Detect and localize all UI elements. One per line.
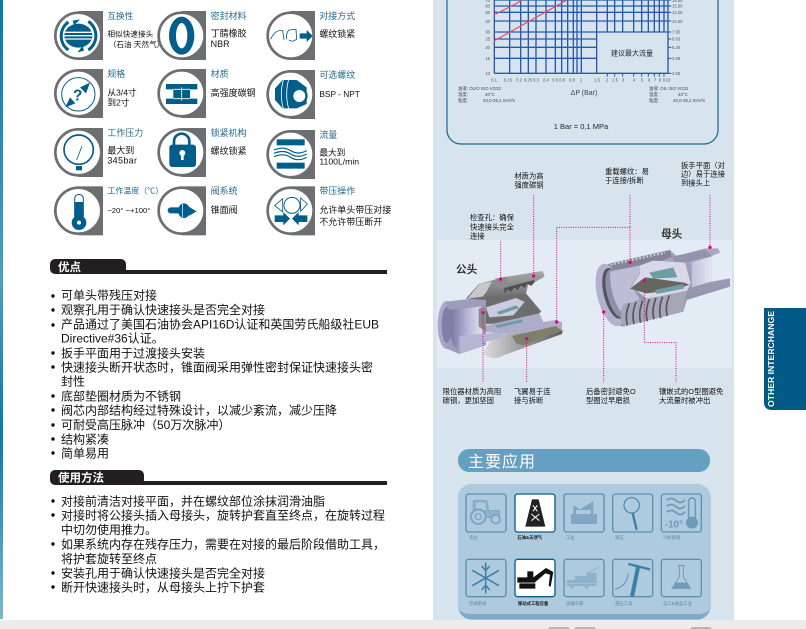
tile: cold: 冷却系统: [663, 534, 681, 541]
tile: oil and gas: [515, 494, 555, 541]
text: 工作温度 body: −20° ~+100°: [107, 206, 150, 215]
tile: oil and gas: 石油&天然气: [517, 534, 543, 541]
text block: advantages list: 简单易用: [61, 446, 109, 460]
icon: size: ?: [73, 88, 82, 105]
text block: advantages list: 可单头带残压对接: [61, 288, 157, 302]
callout: embedded o-ring: 大流量时被冲出: [659, 396, 710, 405]
x axis labels: 2: [606, 78, 609, 82]
heading: 规格: 规格: [107, 68, 125, 79]
tile: mobile construction: [515, 559, 555, 607]
test conditions left: [458, 85, 516, 104]
tile: industry: [564, 494, 604, 540]
label: 公头: 公头: [456, 263, 478, 276]
text block: usage list: 中切勿使用推力。: [61, 522, 157, 537]
text: 工作压力 body: 345bar: [107, 156, 137, 166]
x axis labels: 0.25: [524, 78, 533, 82]
test conditions left: 粘度:: [458, 97, 468, 104]
text: 密封材料 body: NBR: [211, 39, 230, 49]
callout: wing: 接与拆断: [514, 396, 544, 405]
x axis labels: 9: [663, 78, 666, 82]
tab: other interchange: OTHER INTERCHANGE: [766, 311, 776, 407]
text block: usage list: 对接前清洁对接平面，并在螺纹部位涂抹润滑油脂: [61, 494, 325, 508]
text: 锁紧机构 body: 螺纹锁紧: [211, 145, 247, 156]
test conditions left: 20,0-35,2 mm²/s: [483, 98, 516, 103]
test conditions right: 油液: OIL ISO VG32: [649, 85, 689, 92]
icon: valve system: [159, 186, 206, 235]
callout: wrench flats: 边）易于连接: [681, 170, 726, 179]
heading: 工作温度: 工作温度（℃）: [107, 186, 163, 196]
text: 工作压力 body: 最大到: [107, 145, 134, 156]
chart: flow versus pressure drop: [447, 0, 718, 144]
panel: right light blue column: [433, 0, 734, 620]
text: 对接方式 body: 螺纹锁紧: [319, 28, 355, 39]
callout end dots: [481, 246, 712, 340]
x axis labels: 0.6: [559, 78, 566, 82]
tile: chemical and food: 化工&食品工业: [663, 600, 693, 607]
tile: high pressure: [613, 494, 653, 541]
left axis labels: 10: [485, 71, 491, 76]
heading: 主要应用: [458, 449, 710, 472]
callout: heavy duty thread: 于连接/拆断: [605, 176, 644, 185]
label: 母头: 母头: [661, 227, 683, 240]
heading: 阀系统: 阀系统: [211, 185, 238, 196]
heading: 工作压力: 工作压力: [107, 127, 143, 138]
right axis labels: [672, 0, 683, 76]
heading: 互换性: 互换性: [107, 10, 134, 21]
tile: transport vehicles: 运输车辆: [566, 600, 584, 607]
icon: flow: [268, 130, 315, 179]
icon: lock: [159, 128, 206, 177]
test conditions right: 20,0-35,2 mm²/s: [673, 98, 706, 103]
x axis labels: 0.2: [516, 78, 523, 82]
tile: chemical and food: [661, 559, 701, 607]
panel: coupling cutaway diagram: [437, 161, 732, 405]
callout: inspection hole: 检查孔：确保: [470, 213, 515, 222]
test conditions left: 温度:: [458, 91, 468, 98]
icon: temperature: [55, 186, 103, 235]
tile: transport vehicles: [564, 559, 604, 607]
left axis labels: 60: [485, 4, 491, 8]
x axis labels: 2.5: [612, 78, 619, 82]
heading: 锁紧机构: 锁紧机构: [211, 127, 247, 138]
icon: optional thread: [268, 70, 315, 119]
left axis labels: [485, 0, 491, 76]
right axis labels: 7.95: [672, 30, 681, 34]
x axis labels: 0.8: [569, 78, 576, 82]
female coupling: [590, 248, 730, 329]
right axis labels: 15.90: [672, 4, 683, 8]
text: 互换性 body: 相似快速接头: [107, 28, 154, 38]
right axis labels: 13.25: [672, 10, 683, 15]
x axis labels: 4: [633, 78, 636, 82]
tile: hydraulic tools: [613, 559, 653, 607]
heading: 带压操作: 带压操作: [319, 185, 355, 196]
text block: usage list: [51, 494, 385, 594]
male coupling: [438, 271, 563, 358]
test conditions left: 40°C: [485, 92, 495, 97]
text: 规格 body: 从3/4寸: [107, 87, 137, 98]
chart frame: [447, 0, 718, 144]
text block: advantages list: 扳手平面用于过渡接头安装: [61, 346, 205, 360]
heading: 优点: 优点: [58, 260, 81, 274]
text: 阀系统 body: 锥面阀: [211, 204, 238, 215]
heading: 使用方法: [50, 470, 387, 485]
test conditions right: [649, 85, 706, 104]
unit note: 1 Bar = 0,1 MPa: [554, 122, 609, 131]
callout: limiter: 碳钢，更加坚固: [443, 396, 494, 405]
heading: 对接方式: 对接方式: [319, 10, 355, 21]
x axis labels: 10: [666, 78, 671, 82]
callout leader lines: [483, 195, 710, 382]
test conditions right: 40°C: [678, 92, 688, 97]
text block: advantages list: 封性: [61, 374, 85, 388]
icon: material: [159, 69, 206, 118]
callout: wing: 飞翼易于连: [514, 387, 551, 396]
right axis labels: 5.30: [672, 45, 681, 50]
tile: cold: [661, 494, 701, 541]
text: 材质 body: 高强度碳钢: [211, 87, 256, 98]
left axis labels: 50: [485, 10, 491, 15]
flow curves: [494, 0, 567, 41]
heading: 密封材料: 密封材料: [211, 10, 247, 21]
tile: high pressure: 高压: [615, 534, 624, 541]
text block: advantages list: 观察孔用于确认快速接头是否完全对接: [61, 302, 265, 317]
axis title: ΔP (Bar): [571, 90, 597, 97]
text block: advantages list: 可耐受高压脉冲（50万次脉冲）: [61, 417, 230, 432]
right axis labels: 3.98: [672, 56, 681, 61]
heading: 可选螺纹: 可选螺纹: [319, 69, 355, 80]
heading: 材质: 材质: [211, 68, 229, 79]
x axis labels: 5: [641, 78, 644, 82]
tile: agriculture: 农业: [469, 534, 478, 541]
callouts and labels: [443, 161, 726, 405]
heading: 流量: 流量: [319, 129, 337, 140]
tile: cold: -10°: [665, 519, 683, 530]
text block: advantages list: 底部垫圈材质为不锈钢: [61, 388, 181, 404]
right axis labels: 10.60: [672, 19, 683, 24]
test conditions right: 粘度:: [649, 97, 659, 104]
recommended max flow label: 建议最大流量: [611, 48, 653, 58]
icon: seal ring: [159, 11, 206, 60]
x axis labels: 0.15: [504, 78, 513, 82]
text block: advantages list: 结构紧凑: [61, 432, 109, 446]
test conditions left: 油液: OLIO ISO VG32: [458, 85, 502, 92]
callout: inspection hole: 快速接头完全: [470, 222, 515, 231]
callout: backup seal: 型圈过早磨损: [586, 396, 631, 405]
x axis labels: 8: [659, 78, 662, 82]
tile: hydraulic tools: 液压工具: [615, 600, 633, 607]
text block: advantages list: [51, 288, 379, 460]
text block: advantages list: 快速接头断开状态时，锥面阀采用弹性密封保证快速接头密: [61, 360, 373, 374]
text: 密封材料 body: 丁腈橡胶: [211, 28, 247, 39]
text: 可选螺纹 body: BSP - NPT: [319, 89, 360, 99]
x axis labels: [491, 78, 671, 82]
right axis labels: 2.65: [672, 71, 681, 76]
callout: embedded o-ring: 镶嵌式的O型圈避免: [659, 387, 723, 396]
text: 带压操作 body: 不允许带压断开: [319, 216, 382, 227]
x axis labels: 0.1: [491, 78, 498, 82]
text: 流量 body: 最大到: [319, 147, 345, 158]
tile: air conditioning: [466, 559, 506, 607]
callout: wrench flats: 扳手平面（对: [681, 161, 726, 170]
tile: air conditioning: 空调系统: [469, 600, 487, 607]
callout: high strength steel: 材质为高: [514, 171, 544, 180]
text block: usage list: 将护套旋转至终点: [61, 551, 157, 566]
x axis labels: 3: [622, 78, 625, 82]
text block: advantages list: Directive#36认证。: [61, 332, 164, 346]
panel: applications: [458, 484, 711, 620]
text: 带压操作 body: 允许单头带压对接: [319, 204, 391, 215]
icon: connection method: [268, 11, 315, 60]
left axis labels: 15: [485, 56, 491, 61]
tab: other interchange: [764, 308, 806, 410]
callout: heavy duty thread: 重载螺纹：易: [605, 167, 649, 176]
x axis labels: 0.4: [543, 78, 550, 82]
text: 规格 body: 到2寸: [107, 96, 130, 107]
tile: industry: 工业: [566, 534, 575, 540]
callout: inspection hole: 连接: [470, 231, 485, 240]
callout: high strength steel: 强度碳钢: [514, 181, 544, 190]
icon: size: [55, 69, 103, 118]
x axis labels: 1.5: [594, 78, 601, 82]
test conditions right: 温度:: [649, 91, 659, 98]
heading: 使用方法: 使用方法: [58, 470, 104, 484]
heading: 主要应用: 主要应用: [468, 452, 536, 471]
panel: specification icons grid: [55, 10, 391, 235]
text block: advantages list: 阀芯内部结构经过特殊设计，以减少紊流，减少压降: [61, 402, 337, 418]
tile: agriculture: [466, 494, 506, 541]
left axis labels: 30: [485, 30, 491, 34]
x axis labels: 6: [648, 78, 651, 82]
icon: interchangeability: [55, 11, 103, 60]
left axis labels: 40: [485, 19, 491, 24]
x axis labels: 0.3: [533, 78, 540, 82]
tile: mobile construction: 移动式工程设备: [518, 600, 549, 607]
viewer footer bar: [0, 620, 806, 629]
callout: wrench flats: 到接头上: [681, 178, 710, 187]
text: 互换性 body: （石油 天然气）: [109, 39, 164, 49]
callout: limiter: 限位器材质为高阻: [443, 387, 502, 396]
text block: usage list: 对接时将公接头插入母接头，旋转护套直至终点，在旋转过程: [61, 508, 385, 522]
left axis labels: 20: [485, 45, 491, 50]
text block: usage list: 如果系统内存在残存压力，需要在对接的最后阶段借助工具，: [61, 536, 385, 552]
heading: 优点: [50, 259, 387, 274]
icon: working pressure: [55, 128, 103, 177]
x axis labels: 1: [580, 78, 583, 82]
text block: advantages list: 产品通过了美国石油协会API16D认证和英国劳氏船级社EUB: [61, 316, 379, 332]
left axis labels: 25: [485, 36, 491, 42]
right axis labels: 6.63: [672, 36, 681, 42]
text block: usage list: 断开快速接头时，从母接头上拧下护套: [61, 580, 265, 594]
x axis labels: 7: [654, 78, 657, 82]
plot grid: [494, 0, 671, 77]
icon: operation under pressure: [268, 186, 315, 235]
callout: backup seal: 后备密封避免O: [586, 387, 636, 396]
x axis labels: 0.5: [552, 78, 559, 82]
text block: usage list: 安装孔用于确认快速接头是否完全对接: [61, 566, 265, 580]
left edge strip: [0, 0, 3, 619]
text: 流量 body: 1100L/min: [319, 157, 359, 167]
